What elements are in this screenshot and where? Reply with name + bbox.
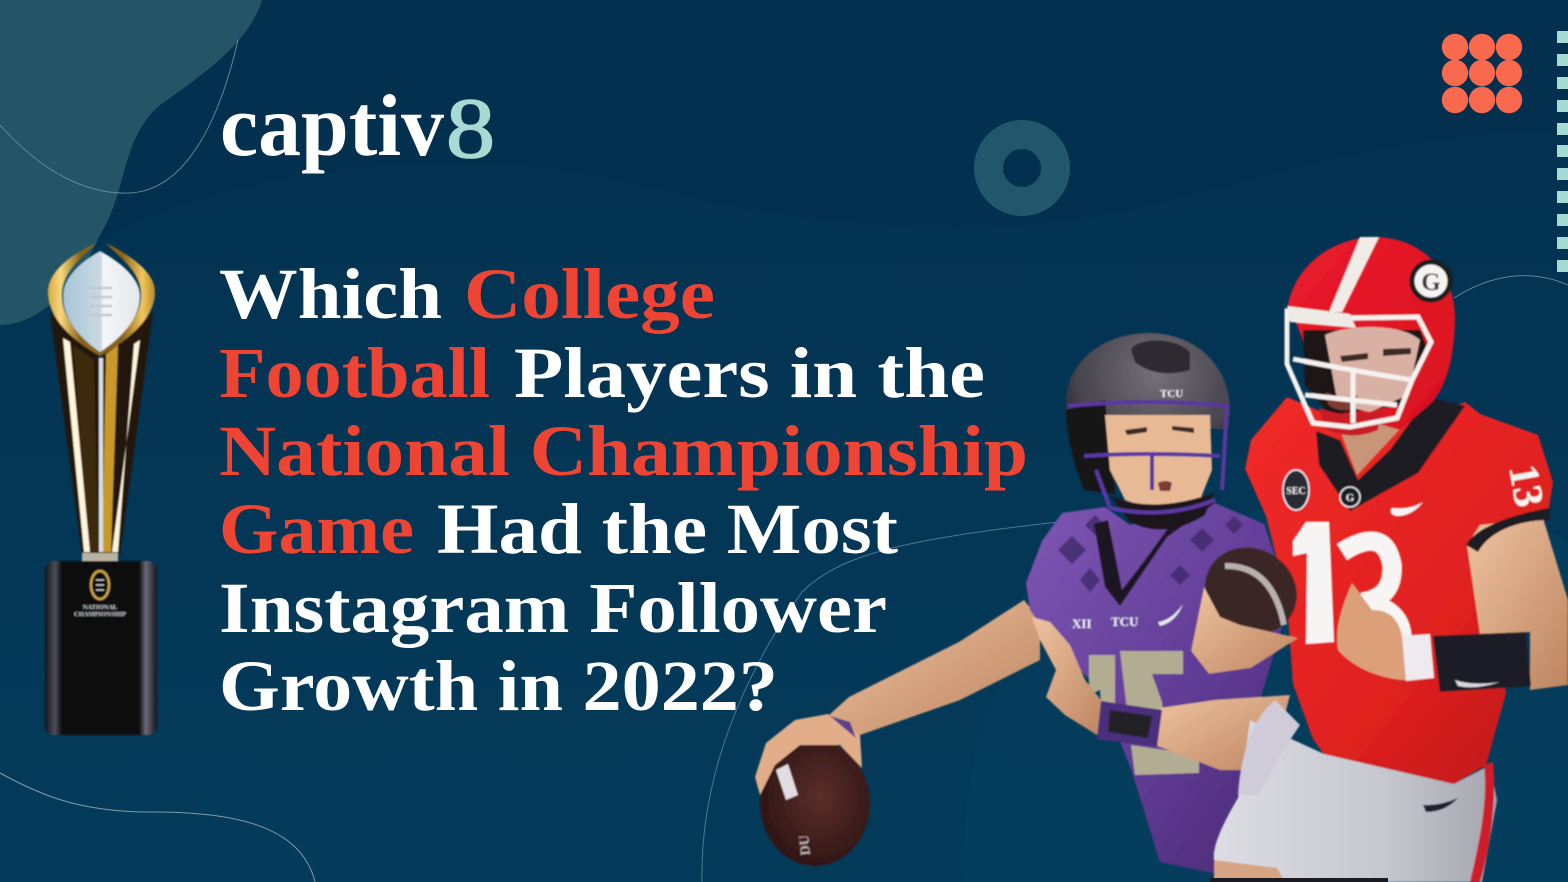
jersey number 15 — [1089, 651, 1199, 775]
jersey — [1245, 397, 1553, 784]
SEC logo: SEC — [1286, 486, 1306, 497]
trophy silver football — [63, 251, 140, 352]
jersey diamond pattern — [1058, 515, 1243, 592]
player: Georgia quarterback — [1189, 237, 1568, 882]
trophy base text: NATIONAL — [83, 604, 118, 611]
icon: coral dot grid — [1442, 34, 1522, 113]
black arm sleeve — [1433, 632, 1531, 692]
decorative thin curve: bottom left — [0, 773, 315, 882]
title: Players in the — [514, 333, 985, 413]
decorative blob: top left — [0, 0, 262, 325]
trophy base emblem — [91, 571, 109, 599]
towel — [1238, 700, 1300, 795]
title: Growth in 2022? — [219, 646, 778, 726]
player: TCU quarterback — [755, 333, 1290, 880]
trophy gold ring — [48, 243, 155, 356]
facemask top bracket — [1287, 306, 1356, 328]
thigh — [1214, 858, 1285, 882]
throwing hand — [755, 714, 862, 795]
upper arm — [1467, 518, 1568, 690]
helmet dark shell — [1066, 400, 1115, 494]
trophy base text — [74, 604, 126, 618]
chest G badge — [1340, 487, 1360, 507]
chest swoosh — [1158, 604, 1183, 626]
red chin cup — [1319, 408, 1381, 436]
SEC logo — [1283, 470, 1309, 510]
title: Instagram Follower — [219, 568, 887, 648]
face — [1105, 415, 1212, 512]
title: Game — [219, 489, 414, 569]
purple facemask — [1068, 402, 1227, 512]
throwing arm — [828, 600, 1040, 735]
helmet crown plate — [1131, 340, 1190, 373]
football: throwing hand — [760, 740, 870, 866]
trophy base text: CHAMPIONSHIP — [74, 611, 126, 618]
swoosh — [1391, 502, 1423, 516]
helmet dark interior — [1303, 330, 1426, 415]
red helmet — [1287, 237, 1455, 430]
logo: captiv8: captiv — [220, 78, 444, 175]
trophy column — [50, 312, 153, 554]
chin guard — [1110, 493, 1214, 530]
title: Which — [219, 254, 442, 334]
bottom black strip — [1210, 878, 1388, 882]
chest labels — [1072, 614, 1139, 631]
pants swoosh — [1423, 798, 1458, 812]
pants — [1214, 720, 1497, 882]
chest labels: TCU — [1111, 614, 1139, 629]
ball-carrying hand — [1191, 587, 1298, 674]
decorative thin curve: centre right — [702, 522, 1058, 882]
chest labels: XII — [1072, 616, 1092, 631]
helmet white stripe — [1329, 237, 1379, 312]
forearm — [1155, 695, 1290, 770]
title: Had the Most — [437, 489, 898, 569]
sleeve number 13: 13 — [1499, 461, 1552, 510]
white wristband — [1402, 634, 1434, 681]
collar — [1094, 498, 1215, 606]
helmet label: TCU — [1160, 388, 1183, 400]
jersey number 13 — [1293, 522, 1402, 645]
decorative thin curve: right — [1454, 276, 1568, 298]
title: National Championship — [219, 411, 1028, 491]
arm sleeve swoosh — [1455, 680, 1500, 687]
helmet G logo — [1412, 262, 1450, 300]
title: College — [464, 254, 715, 334]
face — [1325, 327, 1420, 412]
jersey — [1026, 503, 1290, 880]
logo: captiv8: 8 — [446, 80, 495, 176]
helmet — [1066, 333, 1230, 494]
wristband — [1097, 701, 1162, 747]
white facemask — [1287, 311, 1431, 427]
football: throwing hand: DU — [797, 834, 814, 856]
wrapped football — [1189, 531, 1313, 651]
pants red stripe — [1470, 762, 1494, 882]
title — [219, 254, 1028, 726]
chest G badge: G — [1346, 492, 1355, 504]
decorative teal dashes: right edge — [1557, 31, 1568, 272]
raised hand — [1032, 617, 1105, 735]
black sleeve edge — [1466, 508, 1550, 552]
black neck panel — [1316, 397, 1465, 511]
trophy base — [45, 561, 157, 735]
trophy — [45, 243, 157, 735]
wrist bracelet — [830, 716, 856, 738]
decorative ring — [988, 134, 1056, 202]
title: Football — [219, 333, 490, 413]
helmet G logo: G — [1421, 269, 1441, 296]
trophy stem — [82, 553, 118, 562]
neck — [1340, 402, 1425, 475]
fist — [1337, 583, 1408, 680]
